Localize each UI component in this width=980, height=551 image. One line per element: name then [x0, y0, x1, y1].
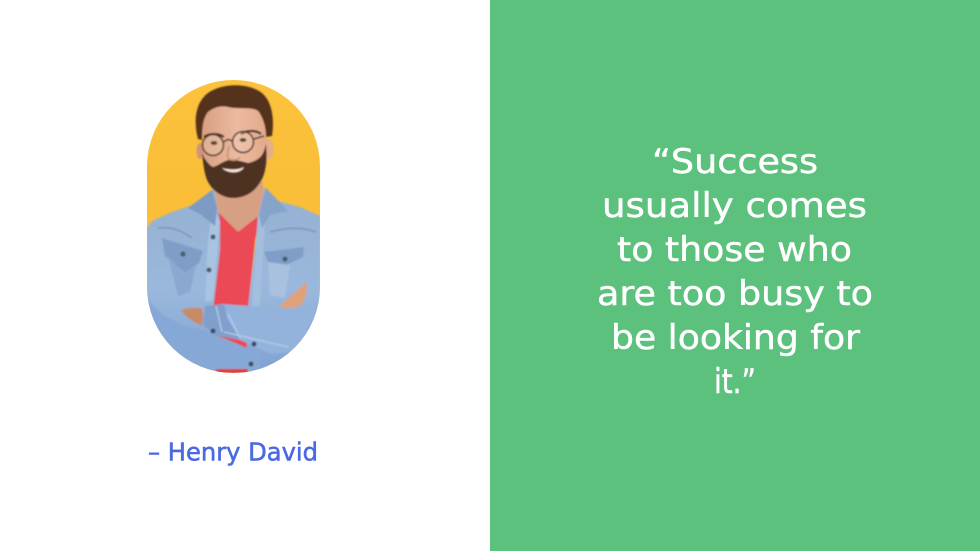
cuff — [203, 304, 240, 340]
glasses — [202, 132, 264, 156]
quote text — [597, 142, 873, 402]
quote line 2: usually comes — [602, 186, 867, 226]
shoulder seams — [158, 228, 316, 238]
eyebrows — [204, 131, 261, 137]
quote line 6: it.” — [714, 362, 756, 402]
hair — [196, 85, 273, 140]
red hem at bottom — [216, 369, 248, 373]
collars — [188, 190, 217, 226]
right chest pocket — [264, 247, 304, 265]
jacket buttons — [210, 234, 216, 240]
smile — [222, 167, 244, 172]
right hand on arm — [279, 282, 307, 308]
left chest pocket — [162, 238, 203, 273]
left forearm skin — [181, 308, 204, 326]
background: white left side — [0, 0, 490, 551]
attribution: Henry David: – Henry David — [148, 438, 318, 466]
denim jacket right — [246, 187, 320, 373]
ears — [196, 143, 204, 159]
beard — [202, 144, 267, 198]
eyes — [211, 141, 217, 145]
red t-shirt — [212, 212, 258, 349]
folded right arm — [202, 304, 315, 354]
quote line 4: are too busy to — [597, 274, 873, 314]
face — [202, 105, 268, 174]
jacket placket shading — [205, 205, 220, 302]
neck — [214, 179, 265, 232]
denim jacket left — [147, 188, 222, 334]
portrait photo in pill frame — [147, 80, 320, 373]
quote line 3: to those who — [617, 230, 852, 270]
folded left arm — [148, 302, 248, 372]
panel: green quote panel — [490, 0, 980, 551]
portrait backdrop — [147, 80, 320, 373]
quote line 1: “Success — [652, 142, 818, 182]
man figure — [147, 85, 320, 373]
quote line 5: be looking for — [611, 318, 860, 358]
nose — [227, 146, 240, 160]
